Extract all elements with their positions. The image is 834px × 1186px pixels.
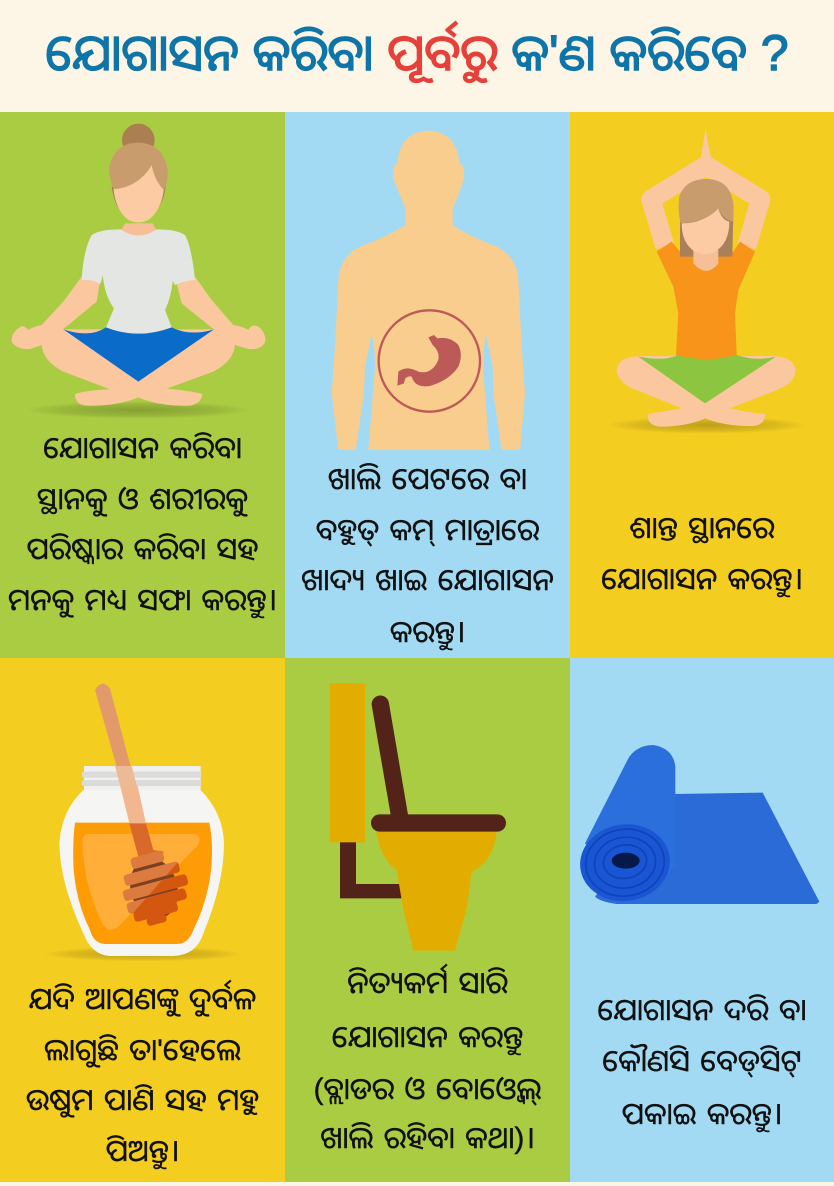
text: clean place and mind: ମନକୁ ମଧ୍ୟ ସଫା କରନ୍ତୁ। xyxy=(8,584,277,616)
text: after toilet routine: ଖାଲି ରହିବା କଥା)। xyxy=(320,1122,535,1155)
text: empty stomach: ବହୁତ୍ କମ୍ ମାତ୍ରାରେ xyxy=(316,514,539,546)
icon: human torso with stomach xyxy=(332,131,525,450)
icon: meditating woman in white shirt xyxy=(12,124,266,419)
text: quiet place: ଯୋଗାସନ କରନ୍ତୁ। xyxy=(601,562,803,596)
text: after toilet routine: ନିତ୍ୟକର୍ମ ସାରି xyxy=(347,967,508,1000)
text: warm water and honey: ଲାଗୁଛି ତା'ହେଲେ xyxy=(44,1034,241,1066)
text: empty stomach xyxy=(301,463,554,650)
icon: rolled yoga mat xyxy=(575,745,819,907)
text: clean place and mind: ପରିଷ୍କାର କରିବା ସହ xyxy=(27,533,258,566)
text: yoga mat or bedsheet: ଯୋଗାସନ ଦରି ବା xyxy=(597,994,807,1027)
panel: quiet place background xyxy=(570,112,834,658)
text: clean place and mind: ଯୋଗାସନ କରିବା xyxy=(43,432,242,465)
text: after toilet routine: ଯୋଗାସନ କରନ୍ତୁ xyxy=(332,1021,523,1054)
text: quiet place xyxy=(601,512,803,598)
text: empty stomach: କରନ୍ତୁ। xyxy=(390,616,465,649)
text: warm water and honey xyxy=(26,980,259,1170)
text: warm water and honey: ଉଷୁମ ପାଣି ସହ ମହୁ xyxy=(26,1084,259,1117)
panel: mat background xyxy=(570,658,834,1182)
text: yoga mat or bedsheet: ପକାଇ କରନ୍ତୁ। xyxy=(622,1098,782,1131)
text: quiet place: ଶାନ୍ତ ସ୍ଥାନରେ xyxy=(629,512,775,545)
icon: toilet xyxy=(330,683,506,951)
panel: clean place background xyxy=(0,112,285,658)
text: empty stomach: ଖାଦ୍ୟ ଖାଇ ଯୋଗାସନ xyxy=(301,564,554,597)
panel: empty stomach background xyxy=(285,112,570,658)
panel: toilet background xyxy=(285,658,570,1182)
text: yoga mat or bedsheet xyxy=(597,994,807,1132)
text: empty stomach: ଖାଲି ପେଟରେ ବା xyxy=(328,463,527,496)
title: ଯୋଗାସନ କରିବା ପୂର୍ବରୁ କ'ଣ କରିବେ ? xyxy=(45,25,789,81)
text: yoga mat or bedsheet: କୌଣସି ବେଡ୍‌ସିଟ୍ xyxy=(602,1044,802,1078)
icon: honey jar with dipper xyxy=(54,684,233,960)
text: after toilet routine: (ବ୍ଲାଡର ଓ ବୋଓ୍ୱେଲ୍ xyxy=(314,1073,541,1106)
text: clean place and mind: ସ୍ଥାନକୁ ଓ ଶରୀରକୁ xyxy=(37,482,248,516)
text: after toilet routine xyxy=(314,964,542,1155)
text: warm water and honey: ପିଅନ୍ତୁ। xyxy=(106,1134,179,1168)
icon: woman with raised hands xyxy=(607,128,807,434)
text: clean place and mind xyxy=(8,432,277,618)
text: warm water and honey: ଯଦି ଆପଣଙ୍କୁ ଦୁର୍ବଳ xyxy=(29,983,256,1016)
panel: honey background xyxy=(0,658,285,1182)
